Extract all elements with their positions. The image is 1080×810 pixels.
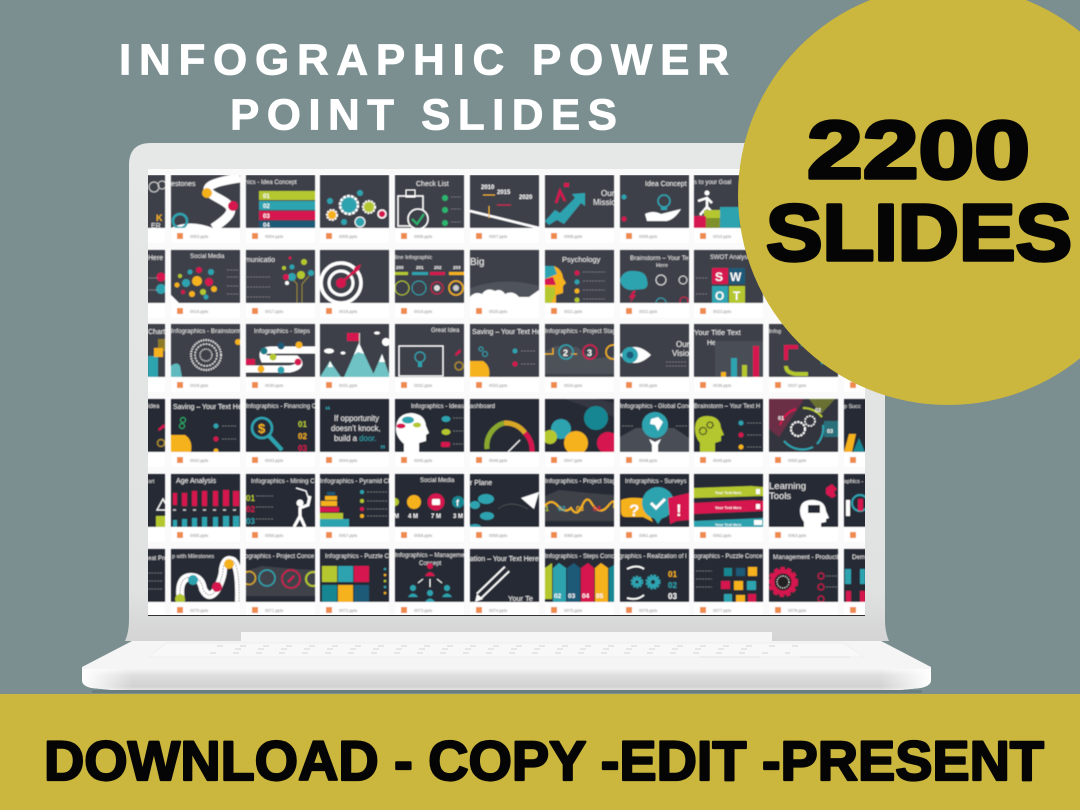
slide 0008: Our	[601, 189, 615, 198]
slide 0035	[620, 324, 694, 392]
laptop hinge	[241, 632, 772, 641]
slide 0042	[170, 398, 241, 464]
slide 0006: 0006.pptx	[414, 234, 433, 239]
bottom band	[0, 694, 1080, 810]
slide 0036: Here	[707, 340, 722, 347]
title: INFOGRAPHIC POWER	[119, 36, 729, 84]
slide 0045: 0045.pptx	[414, 458, 433, 463]
slide 0062	[694, 474, 763, 542]
call to action: DOWNLOAD - COPY -EDIT -PRESENT	[44, 729, 1044, 792]
slide 0034: 0034.pptx	[564, 383, 583, 388]
slide 0050: 01	[778, 416, 784, 422]
slide 0023: W	[730, 270, 742, 284]
slide 0057: 0057.pptx	[339, 533, 358, 538]
slide 0008: 0008.pptx	[564, 234, 583, 239]
slide 0010: 0010.pptx	[713, 234, 732, 239]
slide 0004	[245, 175, 315, 243]
slide 0036: Your Title Text	[694, 328, 742, 337]
slide 0030: Infographics - Steps	[254, 328, 310, 335]
slide 0057	[320, 474, 396, 542]
slide 0046: 0046.pptx	[489, 458, 508, 463]
slide 0029: Infographics - Brainstorming	[171, 328, 250, 335]
slide 0054: art	[148, 479, 155, 485]
slide 0075: 02	[554, 593, 562, 600]
slide 0058	[391, 474, 464, 542]
slide 0005	[320, 175, 389, 243]
slide 0063: Tools	[769, 491, 791, 502]
slide 0060: 02	[558, 506, 566, 513]
title	[119, 36, 729, 140]
slide 0017: municatio	[245, 257, 275, 264]
slide 0032	[395, 324, 464, 392]
slide 0021: Psychology	[562, 255, 601, 264]
slide 0021: 0021.pptx	[564, 309, 583, 314]
slide 0043: 03	[298, 444, 307, 453]
slide 0042: Saving – Your Text Here	[173, 404, 248, 411]
laptop screen with slide thumbnails	[148, 169, 865, 616]
slide 0063: 0063.pptx	[788, 533, 807, 538]
slide 0061	[620, 474, 689, 542]
slide 0022	[620, 250, 689, 318]
slide 0023: T	[733, 289, 741, 303]
slide 0028	[148, 323, 166, 378]
slide 0077	[694, 549, 763, 617]
slide 0075: 0075.pptx	[564, 608, 583, 613]
slide 0038	[850, 382, 856, 388]
slide 0061: ?	[629, 501, 639, 520]
slide 0002: ER	[151, 223, 161, 230]
slide 0043: 01	[298, 420, 307, 429]
slide 0018: 0018.pptx	[339, 309, 358, 314]
slide 0023	[694, 250, 763, 318]
slide 0071: ographics - Project Conce	[245, 554, 315, 560]
slide 0009: Idea Concept	[645, 181, 687, 188]
slide 0075	[545, 549, 621, 617]
slide 0020	[469, 249, 540, 314]
slide 0049	[694, 399, 763, 467]
slide 0007: 2010	[481, 185, 495, 191]
slide 0061: Infographics - Surveys	[625, 478, 687, 485]
slide 0058: f	[456, 498, 460, 508]
slide 0029	[170, 323, 241, 388]
slide 0057: Infographics - Pyramid Cha	[320, 478, 396, 485]
slide 0008	[544, 175, 615, 240]
laptop shadow	[92, 690, 922, 693]
slide 0075: Infographics - Steps Concep	[545, 554, 621, 560]
slide 0058: Social Media	[420, 478, 455, 484]
slide 0037: 0037.pptx	[788, 383, 807, 388]
slide 0033	[469, 323, 540, 388]
slide 0033: 0033.pptx	[489, 383, 508, 388]
slide 0060: 03	[576, 506, 584, 513]
slide 0056: 01	[246, 494, 255, 503]
slide 0004: 0004.pptx	[265, 234, 284, 239]
slide 0060: 0060.pptx	[564, 533, 583, 538]
slide 0003: 0003.pptx	[190, 234, 209, 239]
slide 0036: 0036.pptx	[713, 383, 732, 388]
slide 0007: 2015	[497, 190, 511, 196]
slide 0075: 05	[596, 593, 604, 600]
slide 0023: S	[715, 270, 723, 284]
slide 0009: 0009.pptx	[639, 234, 658, 239]
slide 0077: 0077.pptx	[713, 608, 732, 613]
slide 0029: 0029.pptx	[190, 383, 209, 388]
slide 0031: 0031.pptx	[339, 383, 358, 388]
slide 0020: Big	[470, 257, 484, 268]
slide 0058: 4 M	[408, 514, 418, 520]
slide 0056	[246, 474, 319, 542]
slide 0034: 2	[563, 348, 568, 358]
slide 0035: 0035.pptx	[639, 383, 658, 388]
slide 0054	[96, 474, 169, 542]
slide 0076: 0076.pptx	[639, 608, 658, 613]
slide 0079: Dem	[852, 554, 865, 561]
slide 0071	[242, 549, 320, 617]
slide 0007: 0007.pptx	[489, 234, 508, 239]
slide 0079	[844, 549, 913, 617]
slide 0072: 0072.pptx	[339, 608, 358, 613]
slide 0034	[544, 323, 615, 388]
slide 0036	[694, 324, 763, 392]
slide 0028: Chart	[148, 329, 165, 336]
slide 0005: 0005.pptx	[339, 234, 358, 239]
slide 0058: M	[394, 514, 399, 520]
slide 0050	[769, 399, 838, 467]
slide 0021	[545, 250, 614, 318]
slide 0048: Infographics - Global Conce	[620, 404, 695, 410]
slide 0043	[246, 399, 317, 467]
slide 0033: Saving – Your Text Here	[472, 329, 547, 336]
slide 0019: line Infographic	[395, 255, 433, 261]
slide 0058: 0058.pptx	[414, 533, 433, 538]
slide 0035: Our	[676, 340, 690, 349]
slide 0034: 3	[587, 348, 592, 358]
slide 0044: “	[325, 405, 330, 417]
slide 0048: 0048.pptx	[639, 458, 658, 463]
slide 0019: 203	[453, 265, 461, 270]
slide 0056: 02	[246, 505, 255, 514]
slide 0003: estones	[171, 181, 196, 188]
slide 0022: Brainstorm – Your Te	[630, 255, 689, 262]
slide 0043: $	[258, 421, 266, 436]
slide 0019	[395, 250, 464, 318]
slide 0043: Infographics - Financing C	[246, 404, 317, 410]
slide 0004: 04	[263, 223, 270, 229]
slide 0044	[320, 399, 389, 467]
slide 0007: 2020	[519, 195, 533, 201]
slide 0060	[545, 474, 622, 542]
slide 0004: 01	[263, 194, 270, 200]
slide 0044: ”	[380, 444, 386, 456]
slide 0037: Infog	[769, 329, 781, 335]
slide 0056: 03	[246, 517, 255, 526]
slide 0064	[844, 474, 913, 542]
slide 0015: Here	[148, 255, 163, 262]
badge text: 2200	[807, 105, 1030, 196]
slide 0010: s to your Goal	[694, 180, 731, 186]
slide 0075: 03	[568, 593, 576, 600]
slide 0073	[395, 549, 470, 617]
slide 0072	[320, 549, 389, 617]
slide 0075: 04	[582, 593, 590, 600]
slide 0019: 0019.pptx	[414, 309, 433, 314]
slide 0059	[469, 474, 539, 542]
slide 0063	[769, 474, 838, 542]
slide 0074	[470, 549, 539, 617]
slide 0043: 0043.pptx	[265, 458, 284, 463]
laptop base	[82, 641, 931, 690]
title: POINT SLIDES	[230, 90, 617, 140]
slide 0062: 0062.pptx	[713, 533, 732, 538]
slide 0002: K	[156, 213, 163, 223]
slide 0019: 200	[396, 265, 404, 270]
slide 0056: Infographics - Mining Co	[251, 478, 319, 485]
slide 0015	[148, 249, 166, 304]
slide 0020: 0020.pptx	[489, 309, 508, 314]
slide 0059: 0059.pptx	[489, 533, 508, 538]
slide 0019: 201	[416, 265, 424, 270]
slide 0069: eat Pro	[148, 556, 168, 562]
slide 0045	[395, 399, 464, 467]
slide 0047	[544, 398, 615, 464]
slide 0058: 7 M	[431, 514, 441, 520]
slide 0044: build a door.	[334, 434, 376, 443]
slide 0030: 0030.pptx	[265, 383, 284, 388]
slide 0073: Concept	[419, 561, 442, 567]
slide 0049: Brainstorm – Your Text H	[694, 404, 760, 410]
slide 0076: graphics - Realization of I	[619, 554, 687, 560]
slide 0032: Great Idea	[431, 328, 460, 334]
slide 0044: 0044.pptx	[339, 458, 358, 463]
slide 0059: r Plane	[470, 480, 492, 487]
slide 0070: p with Milestones	[172, 554, 214, 560]
slide 0006: Check List	[416, 181, 449, 188]
screen bottom edge	[148, 615, 865, 616]
slide 0044: doesn't knock,	[331, 424, 381, 433]
slide 0073: 0073.pptx	[414, 608, 433, 613]
slide 0078	[769, 549, 846, 617]
slide 0043: 02	[298, 432, 307, 441]
badge text: SLIDES	[766, 188, 1072, 277]
slide 0041: idea	[148, 404, 160, 410]
slide 0055: 0055.pptx	[190, 533, 209, 538]
slide 0072: Infographics - Puzzle C	[325, 553, 389, 560]
slide 0008: Mission	[593, 198, 620, 207]
slide 0049: 0049.pptx	[713, 458, 732, 463]
slide 0063: Learning	[769, 481, 806, 492]
slide 0074: ation – Your Text Here	[470, 556, 539, 563]
slide 0062: Your Text Here	[715, 506, 741, 510]
slide 0060: 04	[593, 506, 601, 513]
slide 0004: 03	[263, 214, 270, 220]
slide 0023: SWOT Analysis	[710, 255, 752, 261]
laptop	[82, 143, 931, 693]
slide 0050: 02	[815, 408, 821, 414]
slide 0070: 0070.pptx	[190, 608, 209, 613]
slide 0062: Your Text Here	[715, 523, 741, 527]
slide 0076: 02	[668, 581, 677, 590]
slide 0032: 0032.pptx	[414, 383, 433, 388]
slide 0077: ographics - Puzzle Conce	[694, 554, 763, 560]
slide 0030	[246, 324, 315, 392]
slide 0061: !	[676, 501, 682, 520]
slide 0058: 3 M	[453, 514, 463, 520]
slide 0076	[619, 549, 689, 617]
slide 0062: Your Text Here	[715, 491, 741, 495]
slide 0076: 01	[668, 570, 677, 579]
slide 0010	[693, 175, 741, 240]
slide 0017: 0017.pptx	[265, 309, 284, 314]
slide 0034: Infographics - Project Stages	[545, 329, 622, 335]
slide 0078: Management - Production	[773, 554, 846, 561]
slide 0069	[96, 549, 168, 617]
slide 0019: 202	[434, 265, 442, 270]
slide 0071: 0071.pptx	[265, 608, 284, 613]
slide 0064: aphics -	[844, 479, 863, 485]
slide 0017	[245, 250, 315, 318]
slide 0023: O	[715, 289, 724, 303]
slide 0045: Infographics - Ideas	[411, 404, 464, 410]
slide 0041	[148, 398, 166, 452]
badge text	[766, 105, 1072, 277]
slide 0061: 0061.pptx	[639, 533, 658, 538]
slide 0048	[620, 399, 695, 467]
slide 0051: p Succ	[844, 404, 861, 410]
slide 0022: Here	[656, 263, 668, 269]
slide 0003	[171, 175, 240, 243]
slide 0050: 0050.pptx	[788, 458, 807, 463]
slide 0035: Vision	[672, 349, 694, 358]
slide 0037	[769, 324, 838, 392]
slide 0076: 03	[668, 592, 677, 601]
slide 0004: 02	[263, 204, 270, 210]
slide 0055	[171, 474, 240, 542]
slide 0044: If opportunity	[334, 414, 379, 423]
slide 0004: hics - Idea Concept	[245, 180, 297, 186]
laptop lid	[125, 143, 889, 641]
slide 0078: 0078.pptx	[788, 608, 807, 613]
slide 0060: Infographics - Project Stages	[545, 479, 622, 485]
slide 0060: 1	[545, 506, 549, 513]
slide 0016	[171, 250, 240, 318]
slide 0042: 0042.pptx	[190, 458, 209, 463]
slide 0022: 0022.pptx	[639, 309, 658, 314]
badge circle: 2200 slides	[738, 0, 1080, 405]
slide 0016: 0016.pptx	[190, 309, 209, 314]
slide 0070	[171, 549, 240, 617]
slide 0055: Age Analysis	[176, 478, 217, 485]
slide 0023: 0023.pptx	[713, 309, 732, 314]
slide 0009	[620, 175, 689, 243]
slide 0031	[320, 324, 390, 392]
slide 0046: ashboard	[470, 404, 495, 410]
slide 0074: Your Te	[508, 594, 533, 603]
slide 0047: 0047.pptx	[564, 458, 583, 463]
slide 0006	[395, 175, 464, 243]
slide 0050: 03	[827, 429, 833, 435]
slide 0051	[844, 399, 913, 467]
slide 0018	[320, 250, 389, 318]
slide 0056: 0056.pptx	[265, 533, 284, 538]
slide 0073: Infographics – Management	[395, 553, 470, 559]
slide 0002	[148, 175, 166, 228]
slide 0007	[470, 175, 539, 243]
slide 0074: 0074.pptx	[489, 608, 508, 613]
slide 0046	[470, 399, 539, 467]
slide 0016: Social Media	[190, 254, 225, 260]
